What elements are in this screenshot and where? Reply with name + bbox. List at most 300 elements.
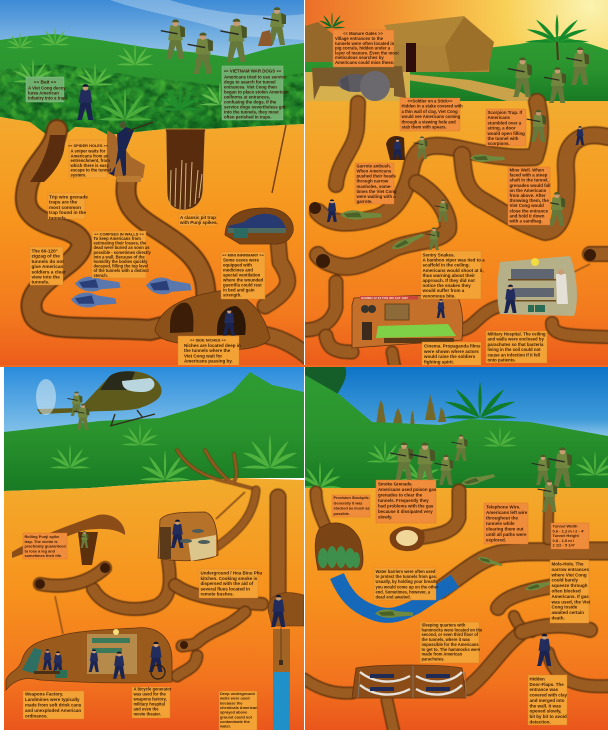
text: zigzag of the tunnels: view into the [32,274,60,280]
callout: Soldier on a Stick: stab them with spears. [402,124,447,130]
callout: Corpses in Walls: possible - sometimes directly [94,250,152,255]
shaft chamber with figure [268,593,304,627]
callout: Sleeping quarters: to get to. The hammocks were [422,647,481,652]
callout: Water barriers: Usually, by holding your breath, [376,579,438,584]
callout: Mine Well: throwing them, the [510,198,549,203]
dirt path [410,74,530,101]
callout: bicycle generator: A bicycle generator [134,686,171,692]
callout: Manure Gates: << Manure Gates >> [343,31,383,36]
text: zigzag of the tunnels [30,247,66,285]
soil [0,117,304,366]
provision chamber [315,523,363,570]
callout: Rolling Punji spike trap: Rolling Punji spike [24,534,59,539]
callout: Smoke Grenade: Americans used poison gas [378,487,437,492]
callout: Military Hospital: living in the soil could not [488,347,541,352]
American soldiers on patrol [390,435,572,488]
callout: Cinema [422,342,481,366]
jungle [4,370,304,495]
callout: Manure Gates: tunnels were often located in [335,41,395,46]
callout: Vietnam War Dogs: «« VIETNAM WAR DOGS »» [224,68,282,74]
callout: Vietnam War Dogs: began to place stolen American [224,90,289,94]
callout: Corpses in Walls: estimating their losses, the [94,241,147,246]
callout: Garrote ambush: times the Viet Cong [356,189,397,194]
callout: Sentry Snakes: scaffold in the ceiling. [422,263,470,268]
callout: Sleeping quarters: impossible for the Americans [422,642,479,647]
callout: Manure Gates: Americans could miss these. [335,60,394,65]
callout: Bait: infantry into a trap. [28,96,67,100]
callout: deep wells [219,691,258,730]
callout: Manure Gates: pig corrals, hidden under a [335,46,391,51]
callout: Rolling Punji spike trap: sometimes their life. [24,553,62,558]
callout: Mole-Hole: awaited certain [552,610,584,615]
callout: Sentry Snakes: thus warning about their [422,273,475,278]
callout: Military Hospital: cause an infection if it fell [488,352,540,357]
jungle [0,27,304,140]
callout: Soldier on a Stick: a thin wall of clay, Viet Cong [402,109,458,114]
sky [0,0,304,62]
callout: Water barriers: to protect the tunnels from gas. [376,574,437,579]
callout: Manure Gates: layer of manure. Even the most [335,50,399,55]
callout: Telephone Wire: Telephone Wire. [486,504,520,510]
callout: Smoke Grenade: grenades to clear the [378,492,423,498]
callout: Corpses in Walls [92,231,152,278]
callout: Mine Well: shaft in the tunnel, [510,178,549,183]
callout: Mini Infirmary: «« MINI INFIRMARY »» [222,252,264,258]
callout: Vietnam War Dogs: into the tunnels, they most [224,110,279,114]
palm trees [318,12,589,60]
callout: Soldier on a Stick: Hidden in a stake covered with [402,104,463,108]
jungle [298,370,608,495]
callout: Garrote ambush: were waiting with a [356,194,396,199]
callout: Mole-Hole: death. [552,616,565,620]
corpses in walls [71,277,192,307]
callout: Spider Holes: system. [70,172,86,178]
sniper figure [108,122,153,182]
callout: Underground kitchen: dispersed with the aid of [200,581,254,586]
tunnels [26,130,310,358]
callout: Sleeping quarters: hammocks were located on the [422,627,483,632]
callout: deep wells: wells were used [219,696,250,701]
callout: Military Hospital: and walls were enclosed by [488,337,544,342]
callout: Telephone Wire: explored. [486,538,506,542]
callout: Mine Well: Viet Cong would [510,203,544,208]
callout: bicycle generator: weapons factory, [132,696,167,702]
callout: Side Niches: Americans passing by. [184,359,233,364]
callout: Spider Holes: escape to the tunnel [70,168,111,173]
callout: Scorpion Trap: would open filling [486,131,525,136]
hidden door figure [537,634,551,666]
callout: Provision Stockpile: stocked as much as [334,507,370,511]
callout: Vietnam War Dogs: entrances. Viet Cong then [224,84,277,90]
sniper dugout [107,130,145,178]
callout: Side Niches: the tunnels where the [184,348,231,353]
callout: Underground kitchen: kitchen. Cooking smoke is [200,576,258,581]
callout: Hidden Door-Flaps [528,675,568,725]
text: trip wire grenade traps: tunnels. [49,215,67,220]
tunnels [304,102,608,368]
pit trap with punji spikes [165,129,206,210]
callout: Mini Infirmary: medicines and [223,268,253,272]
cinema room: KAMMO 12 34 TON 009 SAT 1967 [361,296,408,300]
callout: Scorpion Trap: string, a door [488,126,516,131]
callout: Mole-Hole: Mole-Hole. The [552,562,584,566]
callout: Mini Infirmary [221,252,265,299]
callout: Manure Gates: Village entrances to the [335,36,383,41]
small hut [305,22,333,62]
callout: Smoke Grenade: tunnels. Frequently they [378,498,429,503]
callout: Tunnel Width and Height: 2 1/2 - 5 1/4' [552,543,575,548]
callout: deep wells: contaminate the [220,719,251,724]
callout: Sleeping quarters: made from American [422,652,463,657]
weapons factory [6,628,172,690]
callout: Rolling Punji spike trap [23,533,67,559]
white left margin of lower panel [0,367,4,730]
callout: Vietnam War Dogs: confusing the dogs. If the [224,100,277,104]
callout: Bait [26,77,67,102]
large thatched hut [384,16,494,72]
callout: Tunnel Width and Height [551,523,589,549]
gas cloud [396,530,418,546]
soldier in shaft [538,480,557,512]
callout: Tunnel Width and Height: Tunnel Height [552,533,580,538]
temple silhouettes [376,394,446,428]
callout: Sentry Snakes: A bamboo viper was tied to a [422,258,485,263]
callout: Spider Holes [68,140,111,178]
pigs [338,71,390,101]
text: zigzag of the tunnels: soldiers a clear [32,269,66,274]
callout: Water barriers: end. Sometimes, however, a [376,589,431,594]
callout: Corpses in Walls: of the tunnels with a distinct [94,268,149,273]
callout: Smoke Grenade: slowly. [378,514,392,520]
sunset sky [305,0,608,62]
callout: Mine Well: on the Americans [510,188,547,193]
large ambush chamber [155,290,270,350]
callout: Corpses in Walls: To keep Americans from [94,236,141,241]
callout: Manure Gates [333,30,399,67]
dark tree left [305,367,372,422]
callout: Sleeping quarters: second, or even third floor of [422,632,479,637]
callout: Sentry Snakes: would suffer from a [422,288,465,293]
callout: Spider Holes: which there is easy [70,163,110,168]
callout: Scorpion Trap: stumbled over a [488,120,522,125]
callout: Rolling Punji spike trap: practically guaranteed [24,544,66,549]
band between rows [0,365,608,367]
callout: deep wells: ground could not [220,714,253,719]
pig pen fence [312,66,406,100]
callout: Vietnam War Dogs: dogs to search for tunnel [224,80,276,84]
callout: Sleeping quarters: parachutes. [422,657,444,662]
text: zigzag of the tunnels: zigzag of the [32,254,60,259]
callout: Corpses in Walls: dead were buried as soon as [94,245,150,250]
callout: Hidden Door-Flaps: detection. [530,719,551,724]
panel: bottom-left tunnels (kitchen and factory) [4,367,304,730]
callout: Underground kitchen: Underground / Hoa Binu Phu [200,570,262,576]
callout: Mine Well: from above. After [510,193,546,198]
callout: Vietnam War Dogs: uniforms at entrances, [224,94,270,100]
callout: Rolling Punji spike trap: to lose a leg and [24,548,56,553]
soldier in water [375,609,414,618]
text: trip wire grenade traps: trap found in the [49,210,86,215]
callout: Mine Well: Mine Well. When [510,168,544,172]
callout: Side Niches: Niches are located deep in [184,343,241,348]
text: trip wire grenade traps [48,193,88,220]
callout: Hidden Door-Flaps: Hidden [530,676,545,682]
callout: Water barriers: Water barriers were often used [376,569,435,574]
callout: Provision Stockpile: Provision Stockpile. [334,496,370,500]
callout: bicycle generator [132,686,172,718]
callout: bicycle generator: was used for the [132,692,167,696]
tunnels [40,450,278,676]
mini infirmary cave [225,208,293,244]
callout: Sleeping quarters [420,622,483,663]
callout: Mole-Hole: was used, the Viet [550,599,591,604]
callout: Corpses in Walls: humidity the bodies quickly [94,259,148,264]
cinema room [352,294,463,348]
callout: Sentry Snakes: Americans would shoot at it, [422,268,484,273]
callout: Provision Stockpile [332,495,370,517]
soil [4,478,304,730]
callout: Corpses in Walls: stench. [94,273,108,278]
callout: Mole-Hole: often blocked [552,588,581,594]
text: trip wire grenade traps: Trip wire grenade [49,194,88,200]
callout: Mine Well: grenades would fall [510,183,550,188]
callout: Cinema: were shown where actors [423,349,479,354]
callout: Spider Holes: «« SPIDER HOLES »» [68,143,108,148]
callout: Soldier on a Stick: through a viewing hole and [402,119,456,124]
callout: Mine Well: with a sandbag. [508,218,542,224]
callout: Vietnam War Dogs [222,66,289,120]
callout: Garrote ambush [355,163,397,204]
text: classic pit trap [179,214,218,226]
text: trip wire grenade traps: traps are the [49,200,78,205]
callout: Hidden Door-Flaps: the wall. It was [530,703,562,708]
callout: Weapons Factory: and unexploded American [25,708,81,713]
callout: Sentry Snakes [421,251,485,299]
callout: Mole-Hole: Cong inside [552,605,578,610]
callout: Smoke Grenade: had problems with the gas [378,504,434,508]
callout: Manure Gates: meticulous searches by [335,55,384,60]
callout: Garrote ambush: Garrote ambush. [356,164,391,168]
callout: Scorpion Trap: the tunnel with [488,136,519,141]
palm tree [443,382,517,419]
stake niche [386,136,405,160]
sleeping quarters [352,665,466,698]
callout: Rolling Punji spike trap: trap. The victim is [24,539,58,544]
callout: Corpses in Walls: into a wall. Because of the [94,254,145,259]
callout: Mole-Hole: squeeze through [552,583,588,588]
decoy figure [77,84,93,120]
callout: Mine Well: faced with a steep [510,173,548,178]
callout: Vietnam War Dogs: often perished in traps. [224,114,272,120]
callout: Mine Well: and hold it down [510,213,545,218]
kitchen chamber [158,512,218,561]
text: zigzag of the tunnels: tunnels. [32,280,49,285]
callout: Mole-Hole [550,560,591,623]
callout: Bait: lures American [28,90,59,96]
callout: deep wells: Deep underground [220,691,255,696]
panel: bottom-right tunnels (gas, water barriers, sleeping quarters) [298,367,608,730]
callout: Mole-Hole: could barely [552,578,579,583]
callout: bicycle generator: military hospital [134,702,165,706]
callout: Side Niches [178,336,241,366]
callout: Hidden Door-Flaps: bit by bit to avoid [530,714,567,719]
callout: Smoke Grenade [376,480,437,523]
callout: Garrote ambush: pushed their heads [356,174,397,179]
callout: Weapons Factory: Weapons Factory. [25,692,63,696]
callout: Cinema: Cinema. Propaganda films [424,344,481,348]
military hospital [497,256,577,316]
callout: Tunnel Width and Height: 0.6 - 1.2 m / 2 - 4' [552,528,584,533]
callout: deep wells: because the [220,700,243,705]
callout: Military Hospital: Military Hospital. The ceiling [488,332,546,336]
text: zigzag of the tunnels: The 60-120° [32,248,58,254]
callout: Hidden Door-Flaps: opened slowly, [530,709,561,714]
callout: Water barriers [374,568,439,600]
callout: Smoke Grenade: because it dissipated very [378,509,433,514]
callout: Water barriers: you would come up on the other [376,584,439,589]
pen ground [305,72,410,102]
callout: Corpses in Walls: «« CORPSES IN WALLS »» [94,232,144,236]
text: zigzag of the tunnels: give American [32,264,64,269]
callout: Spider Holes: A sniper waits for [70,148,105,154]
tunnels [304,491,608,730]
soldiers in tunnels [327,47,589,252]
text: zigzag of the tunnels: tunnels do not [32,259,64,264]
callout: Underground kitchen: several flues located in [200,586,250,591]
callout: Bait: «« Bait »» [34,80,57,86]
panel: top-right tunnels (village and hospital) [304,0,608,368]
callout: Mini Infirmary: equipped with [223,262,252,268]
spider hole entry [30,135,66,182]
text: trip wire grenade traps: most common [49,205,81,210]
callout: Garrote ambush: garrote. [356,199,372,204]
well with water [273,627,290,730]
callout: Sleeping quarters: the tunnels, where it was [422,637,471,642]
callout: Spider Holes: entrenchment, from [70,158,110,163]
callout: Scorpion Trap: Americans [488,115,511,120]
callout: Military Hospital: onto patients. [488,358,516,362]
callout: Garrote ambush: When Americans [356,169,392,174]
callout: Side Niches: «« SIDE NICHES »» [190,338,226,342]
text: classic pit trap: A classic pit trap [180,215,216,220]
callout: Cinema: would raise the soldiers [423,354,476,359]
callout: Scorpion Trap: scorpions. [488,141,510,146]
callout: Military Hospital: parachutes so that bacteria [488,342,544,347]
callout: Cinema: fighting spirit. [424,359,454,364]
callout: Tunnel Width and Height: 0.8 - 1.6 m / [552,538,575,543]
callout: Telephone Wire: tunnels while [486,521,515,526]
callout: Mine Well [508,167,550,225]
callout: Telephone Wire [484,503,528,544]
callout: Telephone Wire: throughout the [486,516,518,520]
callout: Tunnel Width and Height: Tunnel Width [552,524,578,528]
callout: deep wells: water. [219,724,231,729]
rolling punji cave [12,515,125,565]
vent pipe [272,125,286,193]
callout: Hidden Door-Flaps: covered with clay [530,693,568,698]
panel: top-left tunnels (traps and bait) [0,0,310,366]
soldiers in tunnels [476,555,554,593]
callout: Mini Infirmary: strength. [223,292,241,298]
callout: Telephone Wire: Americans left wire [486,510,528,515]
callout: Underground kitchen [199,569,262,598]
cloud streak [110,0,304,40]
jungle field [305,36,608,101]
callout: bicycle generator: movie theater. [134,712,161,716]
callout: Mole-Hole: Americans. If gas [552,594,589,599]
callout: Sentry Snakes: approach. If they did not [422,278,475,283]
callout: Corpses in Walls: decayed, filling the top level [94,264,148,269]
callout: Provision Stockpile: Generally it was [334,501,362,505]
callout: Mini Infirmary: in bed and gain [223,288,255,292]
callout: Sleeping quarters: Sleeping quarters with [422,622,465,628]
callout: Hidden Door-Flaps: Door-Flaps. The [530,682,564,687]
callout: Side Niches: Viet Cong wait for [184,353,222,358]
callout: Military Hospital [486,331,547,363]
callout: Garrote ambush: manholes, some- [356,184,392,189]
callout: Hidden Door-Flaps: entrance was [530,687,559,692]
callout: Mini Infirmary: where the wounded [222,278,263,282]
callout: Garrote ambush: through narrow [356,179,389,184]
callout: Scorpion Trap [486,109,526,146]
callout: Vietnam War Dogs: service dogs nevertheless got [224,104,286,110]
callout: Soldier on a Stick: would see Americans coming [400,114,461,119]
callout: Vietnam War Dogs: Americans tried to use service [224,74,286,80]
sky [305,367,608,442]
callout: Telephone Wire: clearing them out [486,526,524,532]
callout: Sentry Snakes: notice the snakes they [422,283,471,288]
callout: Sentry Snakes: venomous bite. [422,293,456,298]
callout: Mini Infirmary: guerrilla could rest [223,282,262,288]
helicopter [36,371,162,430]
callout: Weapons Factory: Landmines were typically [25,697,80,702]
side niche with soldier [217,306,246,336]
soil [305,488,608,730]
hole ends [35,563,188,649]
callout: deep wells: sprayed above [220,710,248,715]
soil [305,101,608,366]
callout: bicycle generator: and even the [134,706,159,712]
American soldiers [161,7,286,74]
callout: Weapons Factory [23,691,84,719]
callout: Water barriers: dead end awaited. [376,594,411,600]
text: classic pit trap: with Punji spikes. [179,220,218,225]
callout: Provision Stockpile: possible. [334,512,350,516]
gas chamber [390,526,425,551]
callout: Bait: A Viet Cong decoy [28,86,66,90]
callout: Mole-Hole: narrow entrances [552,567,590,572]
callout: Underground kitchen: remote bushes. [200,592,234,597]
callout: Weapons Factory: ordinance. [25,714,48,718]
callout: Smoke Grenade: Smoke Grenade. [378,482,413,486]
callout: Weapons Factory: made from soft drink cans [25,702,82,708]
callout: Mole-Hole: where Viet Cong [550,572,587,577]
callout: Mini Infirmary: special ventilation [223,272,261,278]
callout: Telephone Wire: until all paths were [486,532,527,537]
callout: Soldier on a Stick [400,98,463,131]
callout: Scorpion Trap: Scorpion Trap. If [488,110,522,115]
water-filled tunnel [337,576,455,615]
side niche left [170,303,193,333]
callout: Mine Well: close the entrance [510,208,549,213]
callout: deep wells: chemicals American [220,705,258,710]
sky [4,367,304,442]
callout: Sentry Snakes: Sentry Snakes. [422,252,455,258]
callout: Spider Holes: Americans from an [70,153,109,158]
callout: Mini Infirmary: Some caves were [223,258,259,262]
callout: Soldier on a Stick: <<Soldier on a Stick>> [408,98,453,104]
callout: Hidden Door-Flaps: and merged into [530,698,565,703]
